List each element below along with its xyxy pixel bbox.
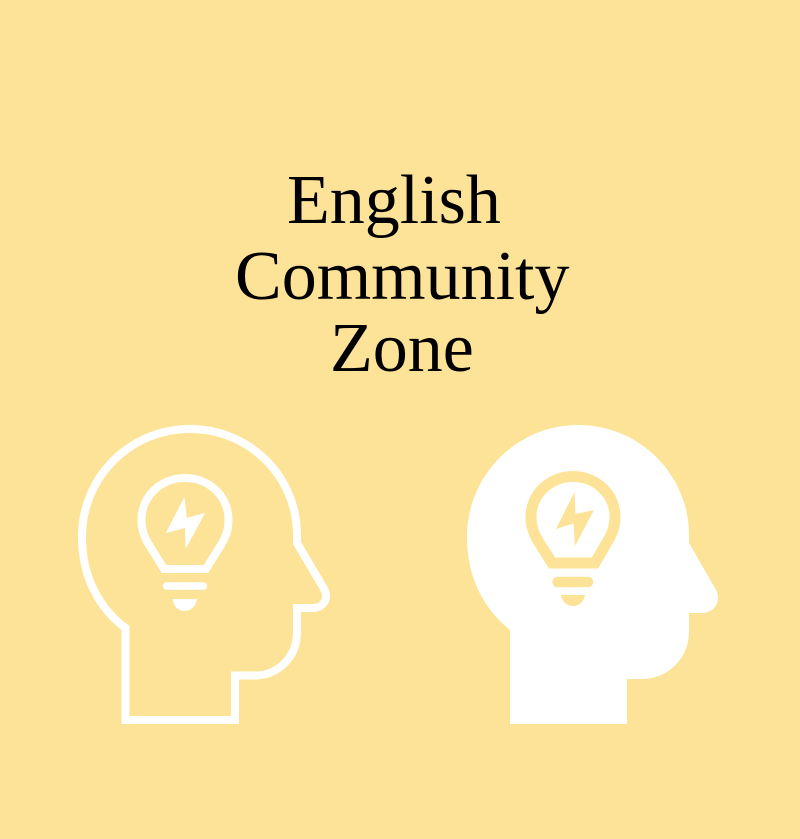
title	[235, 162, 570, 387]
icon: solid head with light bulb	[467, 425, 718, 724]
icon: outlined head with light bulb	[82, 429, 326, 720]
title: Zone	[330, 310, 474, 387]
title: Community	[235, 238, 569, 315]
title: English	[287, 162, 501, 239]
